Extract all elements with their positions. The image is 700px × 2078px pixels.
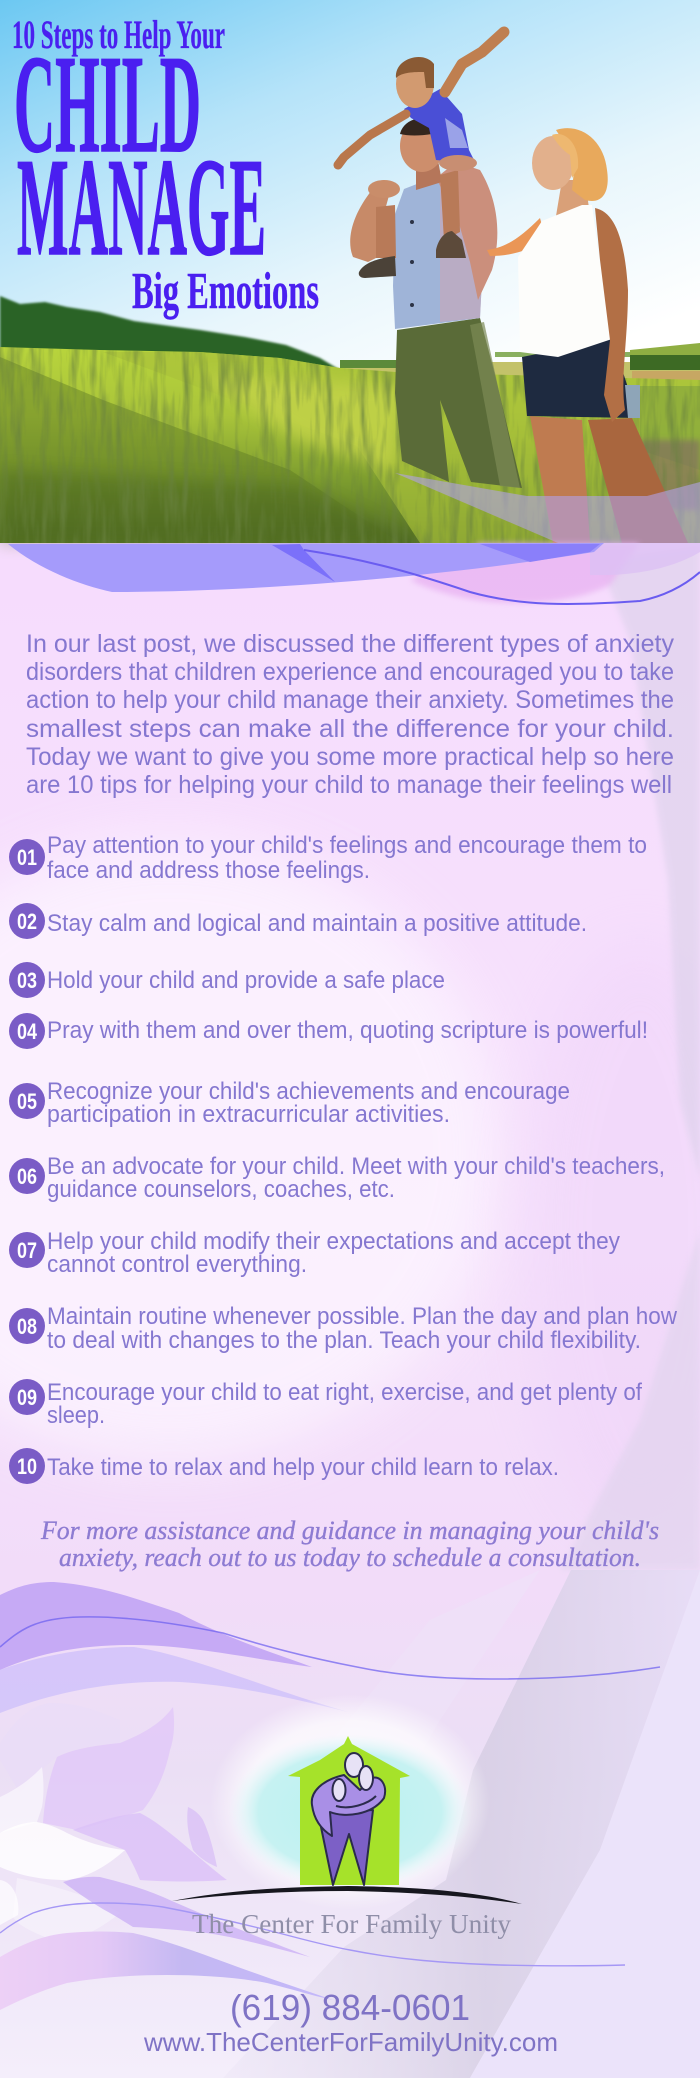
tip 04 [9, 1013, 648, 1049]
leaves [0, 1703, 227, 1943]
intro paragraph: Today we want to give you some more practical help so here [26, 743, 674, 771]
tip 03: Hold your child and provide a safe place [47, 967, 445, 994]
intro paragraph: smallest steps can make all the difference for your child. [26, 715, 674, 743]
tip 07 [9, 1228, 620, 1278]
tip 07: 07 [17, 1238, 37, 1263]
phone number: (619) 884-0601 [230, 1987, 470, 2028]
logo: The Center For Family Unity [172, 1694, 522, 1939]
tip 08: 08 [17, 1314, 37, 1339]
meadow [0, 345, 700, 543]
tip 09: Encourage your child to eat right, exercise, and get plenty of [47, 1379, 642, 1406]
tip 04: Pray with them and over them, quoting scripture is powerful! [47, 1017, 648, 1044]
translucent wave over photo [395, 473, 700, 543]
lower wave [0, 1877, 625, 2010]
distant fields [340, 343, 700, 408]
intro paragraph: action to help your child manage their anxiety. Sometimes the [26, 686, 674, 714]
tips list [9, 832, 678, 1484]
upper wave [0, 1582, 660, 1713]
tip 02: 02 [17, 909, 37, 934]
closing call to action: For more assistance and guidance in managing your child's [40, 1516, 659, 1545]
tip 06: Be an advocate for your child. Meet with your child's teachers, [47, 1153, 665, 1180]
tip 06: guidance counselors, coaches, etc. [47, 1176, 395, 1203]
tip 01: 01 [17, 845, 37, 870]
icon: embracing family [312, 1753, 385, 1885]
tip 01: face and address those feelings. [47, 857, 370, 884]
photo: family in a meadow [0, 0, 700, 543]
tip 09: 09 [17, 1385, 37, 1410]
logo halo [210, 1694, 490, 1910]
tip 01 [9, 832, 647, 884]
intro paragraph: In our last post, we discussed the different types of anxiety [26, 630, 674, 658]
boy [338, 32, 504, 278]
tip 09 [9, 1379, 642, 1429]
tip 05: participation in extracurricular activities. [47, 1101, 450, 1128]
text: MANAGE [17, 130, 266, 285]
tip 10 [9, 1448, 559, 1484]
intro paragraph: are 10 tips for helping your child to manage their feelings well [26, 771, 672, 799]
intro paragraph [26, 630, 674, 799]
tip 05 [9, 1078, 570, 1128]
tip 10: 10 [17, 1454, 37, 1479]
man [350, 118, 522, 488]
bottom wave and leaf decoration [0, 1582, 660, 2010]
tip 03: 03 [17, 968, 37, 993]
tip 08: to deal with changes to the plan. Teach your child flexibility. [47, 1327, 641, 1354]
tip 01: Pay attention to your child's feelings and encourage them to [47, 832, 647, 859]
title [12, 12, 319, 320]
page background [0, 543, 700, 2078]
closing call to action [40, 1516, 659, 1572]
ground arc [172, 1886, 522, 1904]
tip 04: 04 [17, 1019, 38, 1044]
tip 08: Maintain routine whenever possible. Plan the day and plan how [47, 1303, 678, 1330]
sky [0, 0, 700, 380]
tip 02: Stay calm and logical and maintain a positive attitude. [47, 910, 587, 937]
tip 02 [9, 903, 587, 939]
title line: 10 Steps to Help Your: 10 Steps to Help Your [12, 12, 225, 57]
tip 05: Recognize your child's achievements and encourage [47, 1078, 570, 1105]
contact details [143, 1987, 558, 2057]
woman [487, 128, 688, 543]
tip 05: 05 [17, 1089, 37, 1114]
treeline [0, 296, 340, 375]
tip 06: 06 [17, 1164, 37, 1189]
top wave decoration [8, 543, 700, 604]
website: www.TheCenterForFamilyUnity.com [143, 2027, 558, 2057]
tip 08 [9, 1303, 678, 1354]
closing call to action: anxiety, reach out to us today to schedule a consultation. [59, 1543, 641, 1572]
icon: house [288, 1736, 410, 1885]
logo name: The Center For Family Unity [192, 1909, 511, 1939]
tip 06 [9, 1153, 665, 1203]
tip 09: sleep. [47, 1402, 105, 1429]
tip 07: Help your child modify their expectations and accept they [47, 1228, 620, 1255]
tip 03 [9, 962, 445, 998]
intro paragraph: disorders that children experience and encouraged you to take [26, 658, 674, 686]
title: CHILD [14, 27, 201, 182]
tip 07: cannot control everything. [47, 1251, 307, 1278]
title line: Big Emotions: Big Emotions [132, 263, 319, 320]
tip 10: Take time to relax and help your child learn to relax. [47, 1454, 559, 1481]
